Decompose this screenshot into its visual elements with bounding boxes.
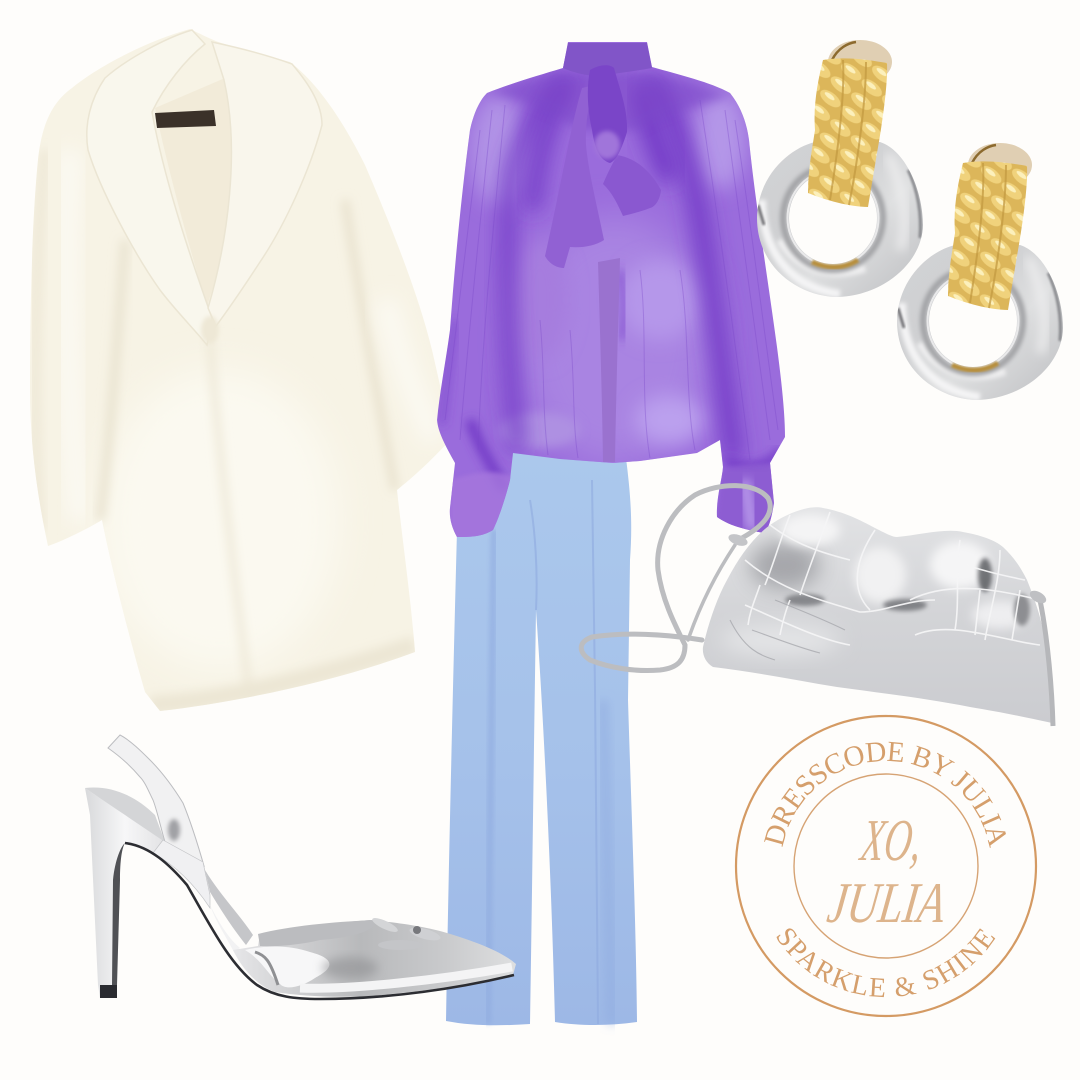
bag side strap: [1040, 600, 1053, 726]
bag strap: [581, 486, 770, 671]
stamp outer ring: [736, 716, 1036, 1016]
coat label: [155, 110, 216, 128]
vamp lower highlight: [300, 967, 512, 988]
crystal bow: [371, 915, 442, 950]
bag body: [703, 507, 1052, 723]
stamp top text: DRESSCODE BY JULIA: [764, 742, 1006, 848]
stamp: dresscode by julia badge: [734, 714, 1038, 1018]
blouse sheer pleat lines: [445, 100, 778, 460]
item: gold and silver door-knocker earrings, right: [897, 143, 1063, 400]
coat closure button: [201, 316, 219, 344]
slingback strap: [108, 735, 204, 866]
stamp inner ring: [794, 774, 978, 958]
croc scale lines: [745, 512, 1040, 645]
insole: [258, 920, 376, 946]
shoe insole at heel: [85, 787, 165, 842]
shoe heel: [85, 788, 165, 998]
blouse dark folds: [442, 80, 782, 490]
sole: [125, 843, 514, 999]
trouser creases: [488, 480, 612, 1024]
quarter panel: [153, 840, 210, 908]
vamp mirror cutout: [245, 946, 329, 987]
heel inner shadow: [112, 843, 125, 985]
bow left tail: [545, 85, 604, 268]
item: gold and silver door-knocker earrings, left: [757, 40, 923, 297]
item: cream faux fur coat: [30, 29, 450, 711]
stamp script Julia: JULIA: [824, 872, 950, 935]
blouse top shade: [490, 70, 730, 130]
item: blue flared trousers: [446, 450, 637, 1025]
side strap: [205, 870, 253, 945]
heel tip: [100, 985, 117, 998]
item: silver mirror slingback heel: [85, 735, 516, 999]
collar band: [563, 43, 652, 76]
blouse placket: [598, 258, 620, 462]
bag strap knot: [727, 532, 749, 548]
bag reflections: [750, 541, 820, 589]
left shawl lapel: [87, 30, 212, 345]
coat lining: [155, 78, 232, 306]
item: silver croc crossbody clutch: [581, 486, 1053, 726]
cuffs: [450, 472, 515, 540]
bow ruffle: [603, 155, 661, 216]
stamp script XO: XO,: [856, 807, 926, 873]
blouse light body and shoulders: [520, 215, 710, 465]
stamp bottom text: SPARKLE & SHINE: [776, 928, 996, 998]
vamp: [233, 920, 516, 997]
right shawl lapel: [208, 42, 322, 326]
bow loop: [588, 65, 627, 163]
item: purple sheer pussy-bow blouse: [437, 42, 785, 540]
